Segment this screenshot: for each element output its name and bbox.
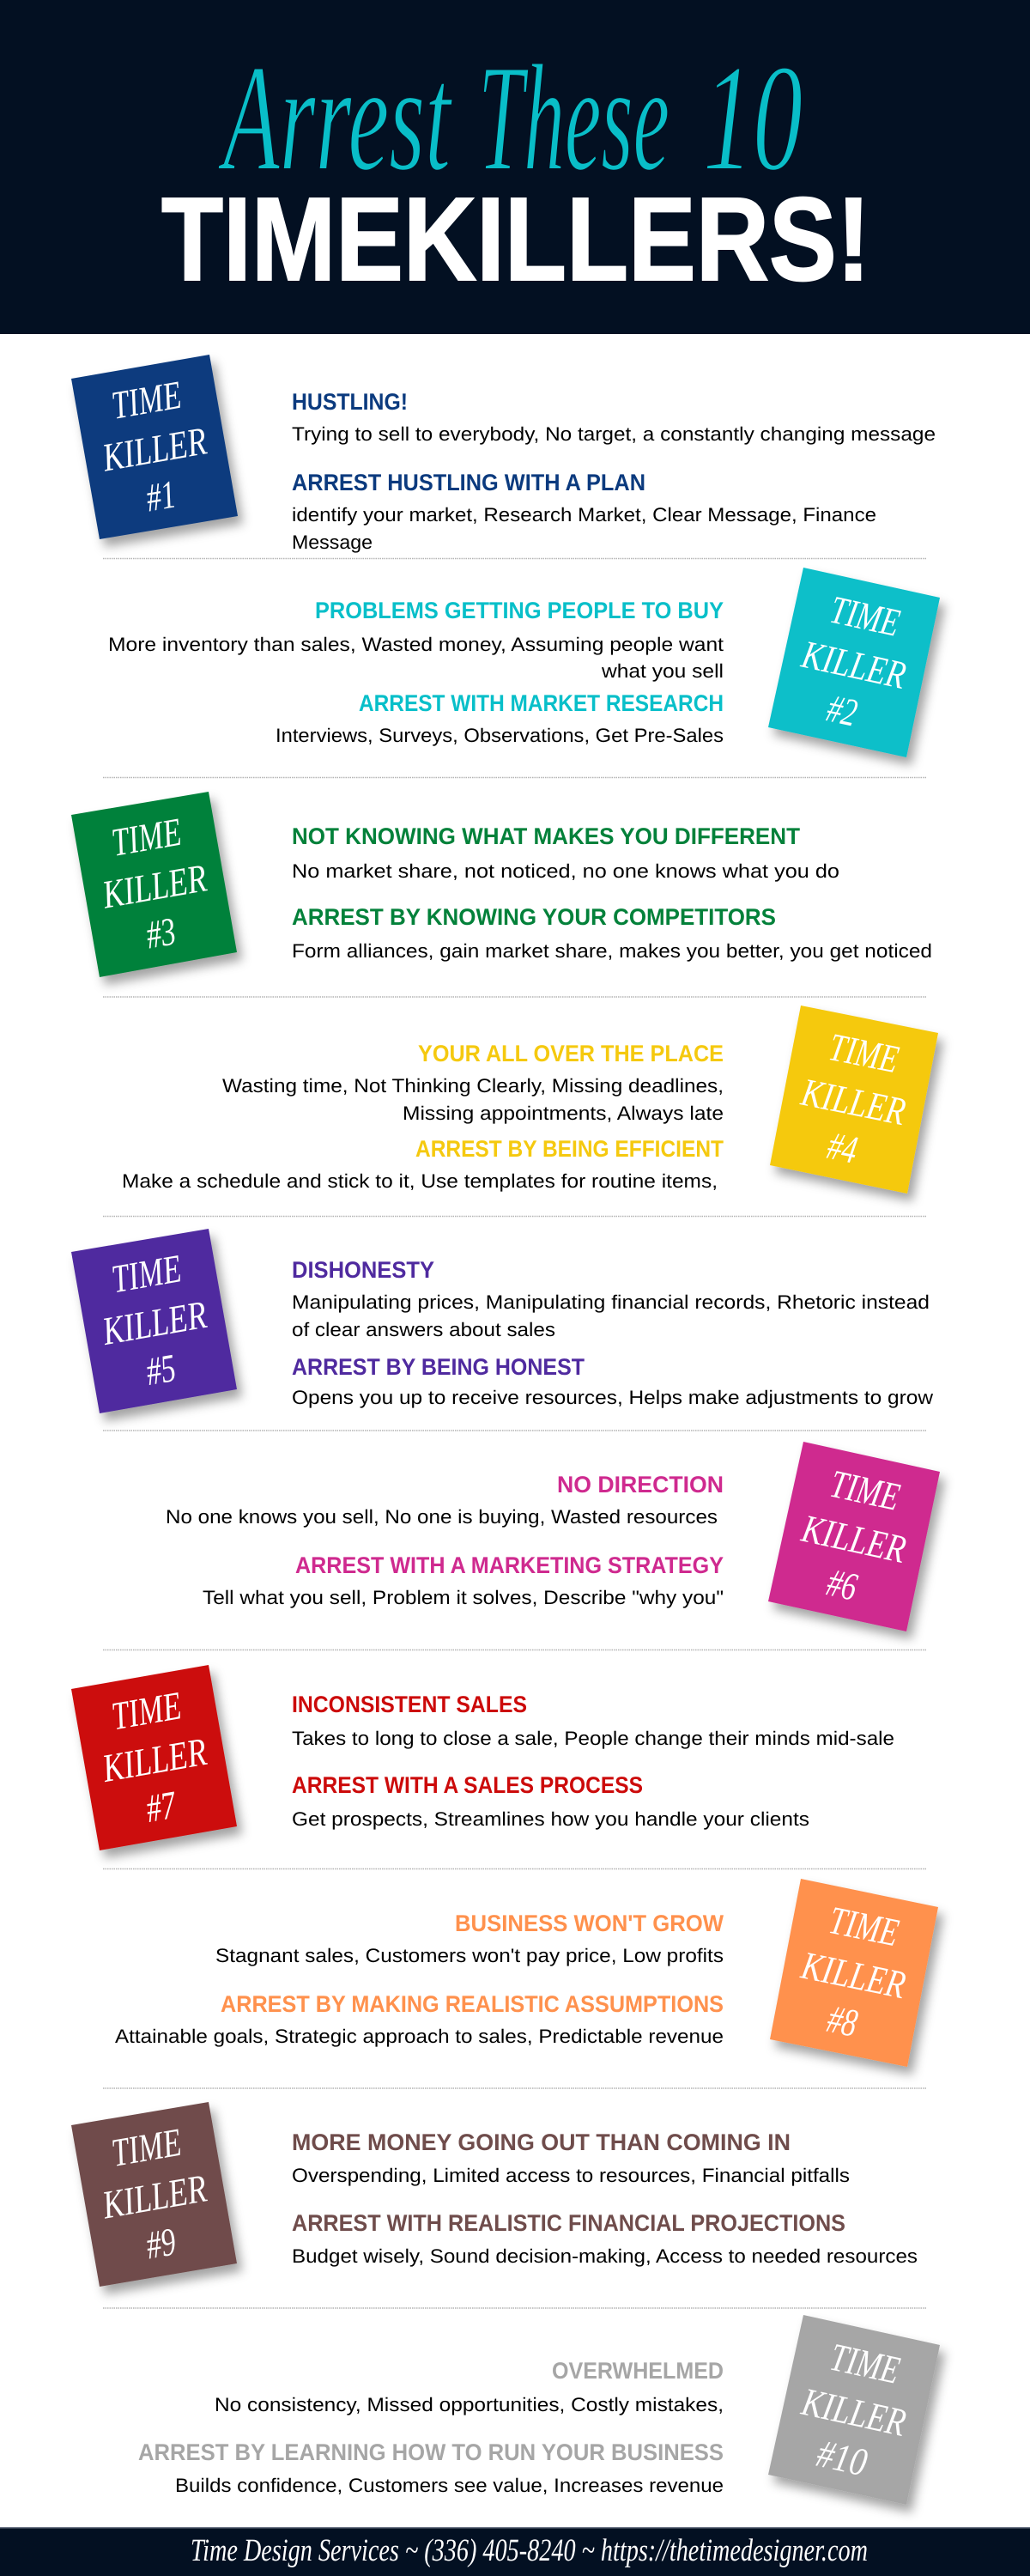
badge 7 xyxy=(71,1665,237,1850)
badge 8: TIME xyxy=(826,1898,902,1954)
badge 5 xyxy=(71,1229,237,1413)
problem text 6: No one knows you sell, No one is buying, Wasted resources xyxy=(166,1506,718,1528)
solution heading 1: ARREST HUSTLING WITH A PLAN xyxy=(292,470,645,495)
problem text 2: More inventory than sales, Wasted money, Assuming people want xyxy=(108,634,724,655)
solution heading 4: ARREST BY BEING EFFICIENT xyxy=(415,1136,724,1162)
problem heading 9: MORE MONEY GOING OUT THAN COMING IN xyxy=(292,2129,791,2155)
badge 10: TIME xyxy=(827,2335,904,2392)
problem text 5 xyxy=(292,1291,930,1340)
problem text 2 xyxy=(108,634,724,682)
solution text 7: Get prospects, Streamlines how you handle your clients xyxy=(292,1808,809,1830)
badge 2 xyxy=(768,568,940,757)
solution text 4: Make a schedule and stick to it, Use templates for routine items, xyxy=(122,1170,718,1192)
problem heading 3: NOT KNOWING WHAT MAKES YOU DIFFERENT xyxy=(292,823,800,849)
title script line: These xyxy=(478,33,670,203)
badge 9: #9 xyxy=(142,2219,179,2268)
badge 9 xyxy=(71,2102,237,2287)
badge 1: #1 xyxy=(142,471,179,520)
badge 4: #4 xyxy=(824,1123,861,1172)
badge 7: TIME xyxy=(108,1683,185,1738)
panel: time killer 7 xyxy=(71,1665,894,1850)
problem heading 2: PROBLEMS GETTING PEOPLE TO BUY xyxy=(315,598,724,623)
problem heading 8: BUSINESS WON'T GROW xyxy=(455,1911,724,1936)
badge 8: #8 xyxy=(824,1996,861,2045)
badge 1: KILLER xyxy=(99,418,209,480)
solution heading 5: ARREST BY BEING HONEST xyxy=(292,1354,585,1380)
problem text 1: Trying to sell to everybody, No target, a constantly changing message xyxy=(292,423,936,445)
badge 6: KILLER xyxy=(797,1506,910,1571)
solution text 5: Opens you up to receive resources, Helps make adjustments to grow xyxy=(292,1387,934,1408)
problem text 5: of clear answers about sales xyxy=(292,1319,555,1340)
problem text 7: Takes to long to close a sale, People change their minds mid-sale xyxy=(292,1728,894,1749)
problem text 9: Overspending, Limited access to resources, Financial pitfalls xyxy=(292,2165,850,2186)
solution heading 8: ARREST BY MAKING REALISTIC ASSUMPTIONS xyxy=(221,1991,724,2017)
header banner xyxy=(0,0,1030,334)
problem heading 5: DISHONESTY xyxy=(292,1257,434,1283)
title script line xyxy=(218,33,803,203)
problem text 5: Manipulating prices, Manipulating financial records, Rhetoric instead xyxy=(292,1291,930,1313)
solution heading 9: ARREST WITH REALISTIC FINANCIAL PROJECTIONS xyxy=(292,2210,845,2236)
badge 6: #6 xyxy=(823,1560,861,1609)
badge 4: KILLER xyxy=(797,1070,909,1133)
solution heading 7: ARREST WITH A SALES PROCESS xyxy=(292,1772,643,1798)
panel: time killer 8 xyxy=(115,1879,938,2067)
problem heading 1: HUSTLING! xyxy=(292,389,408,415)
solution text 3: Form alliances, gain market share, makes you better, you get noticed xyxy=(292,940,932,962)
badge 6 xyxy=(768,1442,940,1631)
badge 5: #5 xyxy=(142,1346,179,1394)
title script line: Arrest xyxy=(218,33,453,203)
badge 10: #10 xyxy=(813,2431,871,2484)
solution heading 2: ARREST WITH MARKET RESEARCH xyxy=(359,690,724,716)
problem heading 7: INCONSISTENT SALES xyxy=(292,1692,527,1717)
badge 10: KILLER xyxy=(797,2379,910,2445)
badge 7: KILLER xyxy=(99,1729,209,1790)
badge 10 xyxy=(768,2315,940,2505)
solution heading 6: ARREST WITH A MARKETING STRATEGY xyxy=(295,1552,724,1578)
badge 8: KILLER xyxy=(797,1943,909,2007)
badge 6: TIME xyxy=(827,1461,904,1519)
panel: time killer 5 xyxy=(71,1229,934,1413)
badge 2: TIME xyxy=(827,587,904,645)
problem text 10: No consistency, Missed opportunities, Costly mistakes, xyxy=(215,2394,724,2415)
panel: time killer 4 xyxy=(122,1005,938,1194)
panel: time killer 9 xyxy=(71,2102,918,2287)
badge 2: #2 xyxy=(823,686,861,735)
solution heading 10: ARREST BY LEARNING HOW TO RUN YOUR BUSINESS xyxy=(138,2439,724,2465)
solution text 9: Budget wisely, Sound decision-making, Access to needed resources xyxy=(292,2245,918,2267)
problem text 4: Wasting time, Not Thinking Clearly, Missing deadlines, xyxy=(222,1075,724,1097)
problem text 4: Missing appointments, Always late xyxy=(403,1103,724,1124)
problem text 3: No market share, not noticed, no one knows what you do xyxy=(292,860,839,882)
badge 1: TIME xyxy=(108,373,185,428)
solution text 2: Interviews, Surveys, Observations, Get Pre-Sales xyxy=(276,725,724,746)
problem text 2: what you sell xyxy=(601,660,724,682)
badge 1 xyxy=(71,355,238,539)
solution text 10: Builds confidence, Customers see value, Increases revenue xyxy=(175,2475,724,2496)
title bold line: TIMEKILLERS! xyxy=(161,173,870,306)
badge 3: TIME xyxy=(108,810,185,865)
badge 8 xyxy=(770,1879,938,2067)
title script line: 10 xyxy=(703,33,803,203)
badge 3: KILLER xyxy=(99,855,209,917)
problem text 4 xyxy=(222,1075,724,1124)
badge 2: KILLER xyxy=(797,632,910,697)
solution heading 3: ARREST BY KNOWING YOUR COMPETITORS xyxy=(292,904,776,930)
panel: time killer 10 xyxy=(138,2315,940,2505)
badge 3 xyxy=(71,792,237,977)
badge 4: TIME xyxy=(826,1024,902,1081)
problem heading 10: OVERWHELMED xyxy=(552,2358,724,2384)
solution text 1 xyxy=(292,504,876,553)
badge 4 xyxy=(770,1005,938,1194)
solution text 8: Attainable goals, Strategic approach to sales, Predictable revenue xyxy=(115,2026,724,2047)
problem text 8: Stagnant sales, Customers won't pay price, Low profits xyxy=(215,1945,724,1966)
solution text 6: Tell what you sell, Problem it solves, Describe "why you" xyxy=(203,1587,724,1608)
badge 3: #3 xyxy=(142,908,179,957)
panel: time killer 6 xyxy=(166,1442,940,1631)
badge 7: #7 xyxy=(142,1783,180,1831)
panel: time killer 2 xyxy=(108,568,940,757)
badge 9: KILLER xyxy=(99,2166,209,2227)
problem heading 6: NO DIRECTION xyxy=(557,1472,724,1498)
panel: time killer 1 xyxy=(71,355,936,553)
solution text 1: Message xyxy=(292,532,373,553)
badge 9: TIME xyxy=(108,2120,185,2175)
problem heading 4: YOUR ALL OVER THE PLACE xyxy=(418,1041,724,1066)
solution text 1: identify your market, Research Market, Clear Message, Finance xyxy=(292,504,876,526)
badge 5: KILLER xyxy=(99,1292,209,1353)
badge 5: TIME xyxy=(108,1246,185,1301)
footer bar xyxy=(0,2527,1030,2576)
panel: time killer 3 xyxy=(71,792,932,977)
